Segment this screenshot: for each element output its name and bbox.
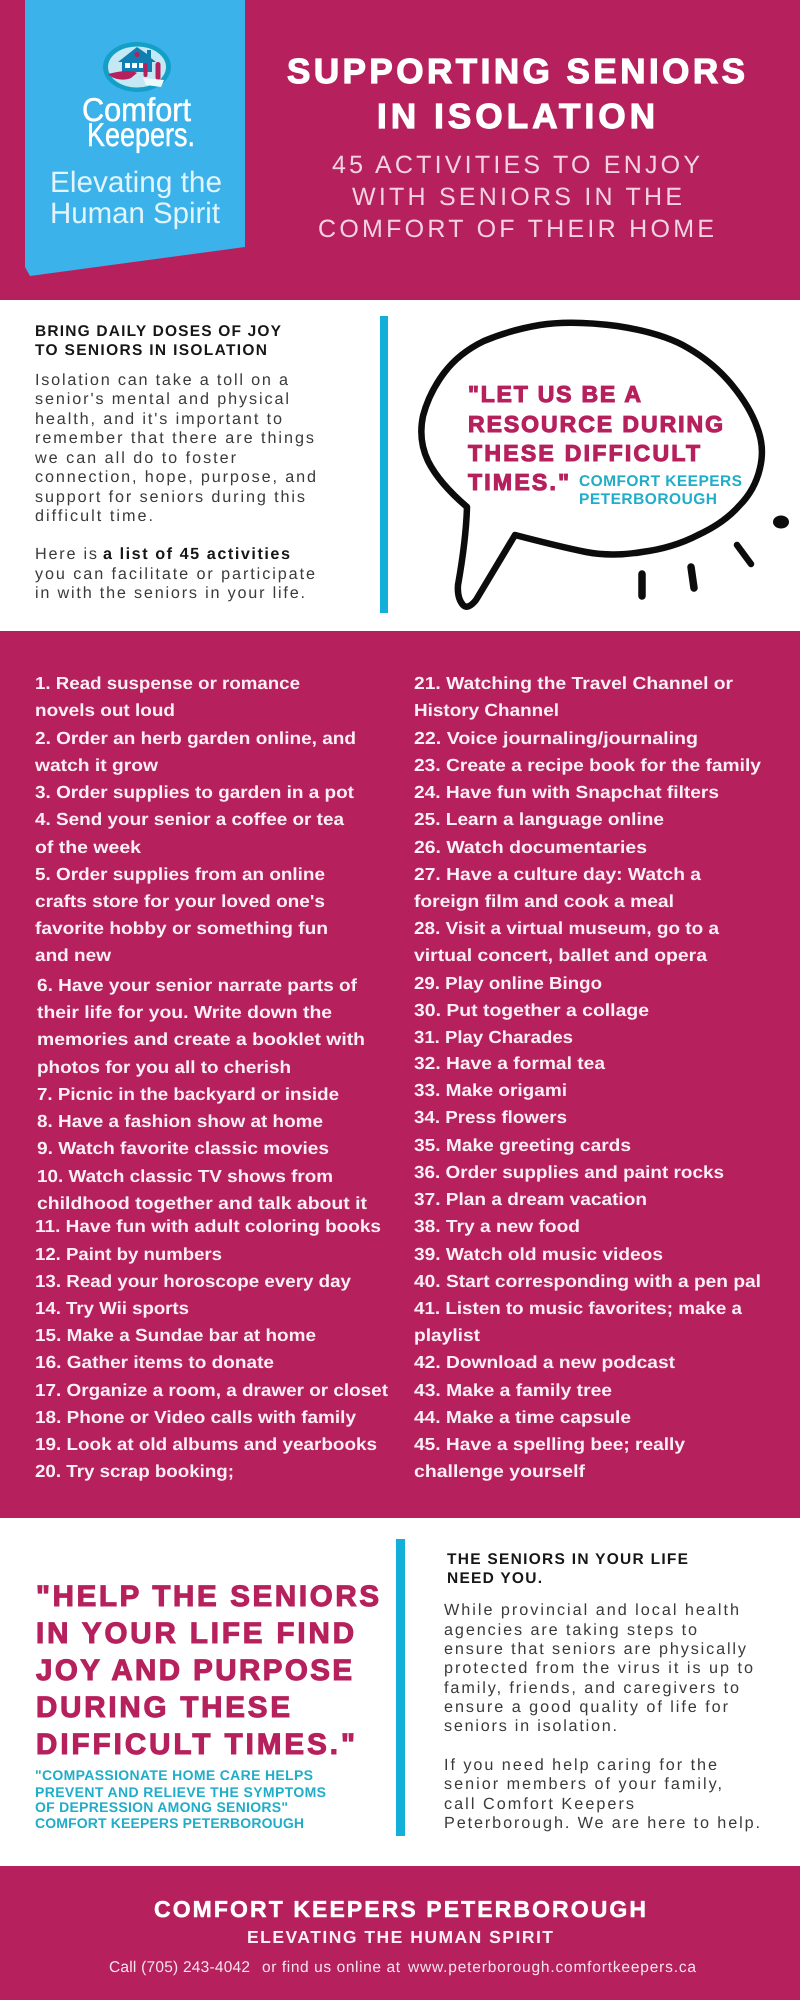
- closing heading: [447, 1551, 688, 1587]
- list column: activities 21 to 45: 27. Have a culture day: Watch a: [414, 864, 701, 884]
- list column: activities 21 to 45: 39. Watch old music videos: [414, 1244, 663, 1264]
- footer name: COMFORT KEEPERS PETERBOROUGH: [154, 1896, 646, 1922]
- footer contact line: www.peterborough.comfortkeepers.ca: [407, 1959, 696, 1976]
- logo wordmark: Comfort: [82, 91, 191, 128]
- subtitle: 45 ACTIVITIES TO ENJOY: [332, 151, 700, 179]
- supporting quote: [35, 1767, 326, 1831]
- list column: activities 1 to 20: favorite hobby or something fun: [35, 918, 328, 938]
- panel: activity list: [0, 631, 800, 1518]
- list column: activities 21 to 45: 43. Make a family tree: [414, 1380, 612, 1400]
- closing text: protected from the virus it is up to: [444, 1659, 753, 1677]
- intro text: support for seniors during this: [35, 488, 305, 506]
- large quote: JOY AND PURPOSE: [36, 1654, 352, 1687]
- list column: activities 1 to 20: 9. Watch favorite classic movies: [37, 1138, 329, 1158]
- logo tagline: Human Spirit: [50, 197, 220, 230]
- logo wordmark: [82, 91, 195, 153]
- list column: activities 21 to 45: challenge yourself: [414, 1461, 585, 1481]
- vertical divider bar: [396, 1539, 405, 1836]
- list column: activities 21 to 45: 45. Have a spelling bee; really: [414, 1434, 685, 1454]
- list column: activities 1 to 20: of the week: [35, 837, 141, 857]
- intro text: Here is: [35, 545, 97, 563]
- large quote: IN YOUR LIFE FIND: [36, 1617, 354, 1650]
- closing text: If you need help caring for the: [444, 1756, 717, 1774]
- intro text: Isolation can take a toll on a: [35, 371, 288, 389]
- list column: activities 1 to 20: 3. Order supplies to garden in a pot: [35, 782, 354, 802]
- list column: activities 1 to 20: 11. Have fun with adult coloring books: [35, 1216, 381, 1236]
- subtitle: COMFORT OF THEIR HOME: [318, 215, 714, 243]
- closing text: ensure a good quality of life for: [444, 1698, 729, 1716]
- list column: activities 21 to 45: virtual concert, ballet and opera: [414, 945, 707, 965]
- list column: activities 1 to 20: and new: [35, 945, 111, 965]
- list column: activities 1 to 20: 19. Look at old albums and yearbooks: [35, 1434, 377, 1454]
- closing text: seniors in isolation.: [444, 1717, 617, 1735]
- bubble quote: "LET US BE A: [468, 381, 641, 407]
- list column: activities 1 to 20: novels out loud: [35, 700, 175, 720]
- large quote: [36, 1580, 379, 1761]
- intro text: health, and it's important to: [35, 410, 282, 428]
- list column: activities 21 to 45: 26. Watch documentaries: [414, 837, 647, 857]
- bubble quote: TIMES.": [468, 469, 569, 495]
- intro text: remember that there are things: [35, 429, 314, 447]
- intro heading: BRING DAILY DOSES OF JOY: [35, 323, 282, 340]
- list column: activities 1 to 20: 15. Make a Sundae bar at home: [35, 1325, 316, 1345]
- list column: activities 21 to 45: 24. Have fun with Snapchat filters: [414, 782, 719, 802]
- closing heading: THE SENIORS IN YOUR LIFE: [447, 1551, 688, 1568]
- list column: activities 21 to 45: 41. Listen to music favorites; make a: [414, 1298, 742, 1318]
- title: [287, 52, 745, 136]
- large quote: DIFFICULT TIMES.": [36, 1728, 355, 1761]
- panel: footer: [0, 1866, 800, 2000]
- bubble attribution: COMFORT KEEPERS: [579, 473, 742, 490]
- panel: introduction: [0, 300, 800, 631]
- list column: activities 21 to 45: 29. Play online Bingo: [414, 973, 602, 993]
- list column: activities 21 to 45: playlist: [414, 1325, 480, 1345]
- intro text: connection, hope, purpose, and: [35, 468, 316, 486]
- intro text: [34, 371, 316, 602]
- list column: activities 1 to 20: 4. Send your senior a coffee or tea: [35, 809, 344, 829]
- list column: activities 1 to 20: photos for you all to cherish: [37, 1057, 291, 1077]
- footer contact line: [109, 1959, 696, 1976]
- list column: activities 1 to 20: 12. Paint by numbers: [35, 1244, 222, 1264]
- footer tagline: ELEVATING THE HUMAN SPIRIT: [247, 1927, 553, 1947]
- list column: activities 1 to 20: 18. Phone or Video calls with family: [35, 1407, 356, 1427]
- panel: closing message: [0, 1518, 800, 1866]
- intro text: we can all do to foster: [34, 449, 237, 467]
- list column: activities 21 to 45: 40. Start corresponding with a pen pal: [414, 1271, 761, 1291]
- list column: activities 21 to 45: [414, 673, 761, 1481]
- closing text: Peterborough. We are here to help.: [444, 1814, 760, 1832]
- supporting quote: COMFORT KEEPERS PETERBOROUGH: [35, 1815, 304, 1831]
- supporting quote: "COMPASSIONATE HOME CARE HELPS: [35, 1767, 313, 1783]
- list column: activities 21 to 45: 25. Learn a language online: [414, 809, 664, 829]
- list column: activities 21 to 45: 32. Have a formal tea: [414, 1053, 605, 1073]
- closing text: While provincial and local health: [444, 1601, 739, 1619]
- footer contact line: Call (705) 243-4042: [109, 1959, 250, 1976]
- vertical divider bar: [380, 316, 388, 613]
- list column: activities 21 to 45: 37. Plan a dream vacation: [414, 1189, 647, 1209]
- list column: activities 21 to 45: 28. Visit a virtual museum, go to a: [414, 918, 719, 938]
- list column: activities 1 to 20: 14. Try Wii sports: [35, 1298, 189, 1318]
- closing text: ensure that seniors are physically: [444, 1640, 747, 1658]
- list column: activities 1 to 20: 13. Read your horoscope every day: [35, 1271, 351, 1291]
- list column: activities 1 to 20: childhood together and talk about it: [37, 1193, 367, 1213]
- intro text: difficult time.: [35, 507, 153, 525]
- list column: activities 1 to 20: 8. Have a fashion show at home: [37, 1111, 323, 1131]
- logo tagline: [50, 166, 222, 230]
- icon: comfort keepers house logo: [103, 42, 171, 92]
- list column: activities 21 to 45: 22. Voice journaling/journaling: [414, 728, 698, 748]
- list column: activities 21 to 45: foreign film and cook a meal: [414, 891, 674, 911]
- logo tagline: Elevating the: [50, 166, 222, 199]
- logo flag: [25, 0, 245, 276]
- subtitle: [318, 151, 714, 243]
- bubble attribution: PETERBOROUGH: [579, 491, 717, 508]
- list column: activities 21 to 45: 44. Make a time capsule: [414, 1407, 631, 1427]
- closing text: senior members of your family,: [444, 1775, 722, 1793]
- list column: activities 21 to 45: 34. Press flowers: [414, 1107, 567, 1127]
- list column: activities 21 to 45: 38. Try a new food: [414, 1216, 580, 1236]
- list column: activities 21 to 45: 36. Order supplies and paint rocks: [414, 1162, 724, 1182]
- list column: activities 1 to 20: 20. Try scrap booking;: [35, 1461, 234, 1481]
- intro text: in with the seniors in your life.: [35, 584, 305, 602]
- list column: activities 1 to 20: memories and create a booklet with: [37, 1029, 365, 1049]
- list column: activities 1 to 20: 1. Read suspense or romance: [35, 673, 300, 693]
- list column: activities 21 to 45: History Channel: [414, 700, 559, 720]
- title: SUPPORTING SENIORS: [287, 52, 745, 91]
- list column: activities 21 to 45: 33. Make origami: [414, 1080, 567, 1100]
- bubble quote: [468, 381, 723, 495]
- closing text: family, friends, and caregivers to: [444, 1679, 739, 1697]
- panel: header: [0, 0, 800, 300]
- bubble quote: THESE DIFFICULT: [468, 440, 700, 466]
- list column: activities 1 to 20: crafts store for your loved one's: [35, 891, 325, 911]
- bubble attribution: [579, 473, 742, 508]
- list column: activities 1 to 20: 2. Order an herb garden online, and: [35, 728, 356, 748]
- closing text: agencies are taking steps to: [444, 1621, 697, 1639]
- large quote: "HELP THE SENIORS: [36, 1580, 379, 1613]
- list column: activities 21 to 45: 42. Download a new podcast: [414, 1352, 675, 1372]
- subtitle: WITH SENIORS IN THE: [352, 183, 682, 211]
- list column: activities 21 to 45: 21. Watching the Travel Channel or: [414, 673, 733, 693]
- list column: activities 1 to 20: their life for you. Write down the: [37, 1002, 332, 1022]
- list column: activities 1 to 20: [34, 673, 388, 1481]
- closing heading: NEED YOU.: [447, 1570, 542, 1587]
- list column: activities 1 to 20: 5. Order supplies from an online: [35, 864, 325, 884]
- logo wordmark: Keepers.: [87, 116, 195, 153]
- intro text: senior's mental and physical: [35, 390, 289, 408]
- list column: activities 1 to 20: 17. Organize a room, a drawer or closet: [35, 1380, 388, 1400]
- intro heading: [35, 323, 282, 359]
- intro heading: TO SENIORS IN ISOLATION: [35, 342, 267, 359]
- supporting quote: PREVENT AND RELIEVE THE SYMPTOMS: [35, 1784, 326, 1800]
- list column: activities 1 to 20: 7. Picnic in the backyard or inside: [37, 1084, 339, 1104]
- bubble quote: RESOURCE DURING: [468, 411, 723, 437]
- list column: activities 1 to 20: watch it grow: [34, 755, 158, 775]
- closing text: call Comfort Keepers: [444, 1795, 634, 1813]
- footer contact line: or find us online at: [262, 1959, 401, 1976]
- list column: activities 21 to 45: 31. Play Charades: [414, 1027, 573, 1047]
- supporting quote: OF DEPRESSION AMONG SENIORS": [35, 1799, 288, 1815]
- speech bubble: [421, 323, 789, 607]
- title: IN ISOLATION: [377, 97, 655, 136]
- intro text: a list of 45 activities: [103, 545, 290, 563]
- list column: activities 21 to 45: 30. Put together a collage: [414, 1000, 649, 1020]
- large quote: DURING THESE: [36, 1691, 290, 1724]
- list column: activities 21 to 45: 35. Make greeting cards: [414, 1135, 631, 1155]
- list column: activities 1 to 20: 16. Gather items to donate: [35, 1352, 274, 1372]
- list column: activities 1 to 20: 6. Have your senior narrate parts of: [37, 975, 357, 995]
- list column: activities 1 to 20: 10. Watch classic TV shows from: [37, 1166, 333, 1186]
- closing text: [444, 1601, 760, 1832]
- list column: activities 21 to 45: 23. Create a recipe book for the family: [414, 755, 761, 775]
- intro text: you can facilitate or participate: [35, 565, 315, 583]
